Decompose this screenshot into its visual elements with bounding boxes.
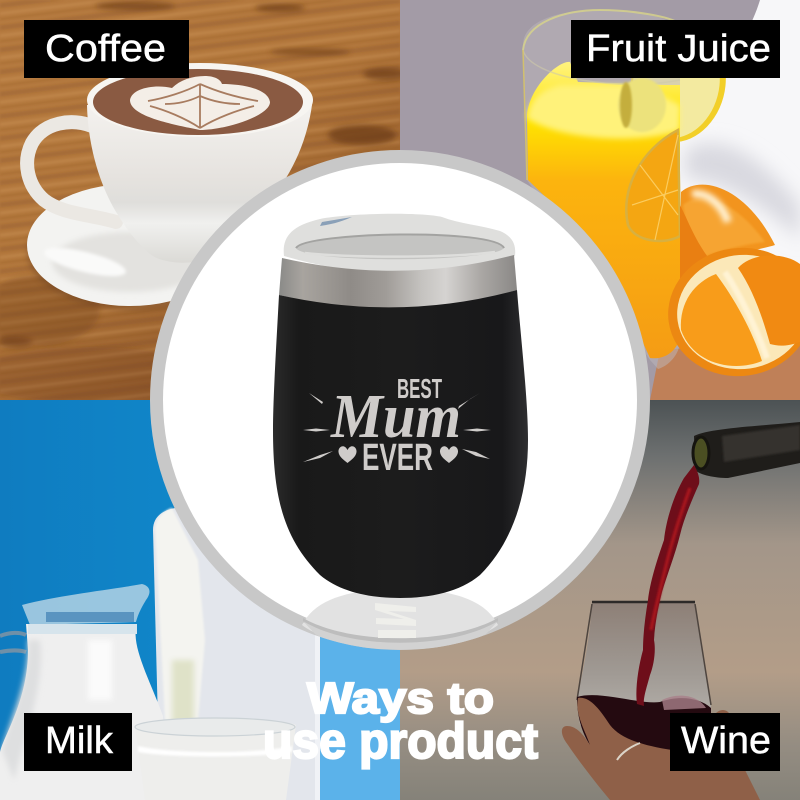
milk bottle	[153, 508, 320, 800]
halved orange front	[668, 248, 800, 376]
title: ways to use product	[263, 674, 538, 769]
wine stream highlight	[651, 488, 690, 630]
label: fruit juice: Fruit Juice	[586, 28, 771, 70]
engraved word: mum: Mum	[330, 383, 461, 451]
product circle	[156, 156, 644, 650]
wine stream	[636, 465, 699, 706]
glass of juice	[523, 10, 680, 369]
milk jug	[0, 584, 166, 800]
engraving: Best Mum Ever	[303, 373, 491, 479]
coffee surface	[93, 69, 303, 135]
panel: fruit juice photo	[400, 0, 800, 400]
engraved rays	[303, 393, 491, 462]
engraved hearts	[338, 446, 458, 463]
label: wine: Wine	[681, 720, 771, 762]
label: milk: Milk	[45, 720, 114, 762]
label: fruit juice	[571, 20, 780, 78]
wine bottle	[693, 422, 800, 478]
label: milk	[24, 713, 132, 771]
latte art	[130, 76, 270, 130]
halved orange back	[680, 185, 775, 280]
lemon slice on rim	[631, 78, 726, 142]
ring	[617, 743, 640, 760]
tumbler steel band	[279, 255, 517, 309]
cloth	[680, 0, 800, 290]
hand holding glass	[562, 698, 760, 800]
wine glass	[577, 602, 711, 755]
panel: milk photo	[0, 400, 400, 800]
coffee cup body	[87, 105, 312, 263]
panel: wine photo	[400, 400, 800, 800]
title line 2: use product	[263, 713, 538, 769]
fingertip behind label	[716, 710, 729, 713]
tumbler lid	[284, 214, 515, 273]
lemon slice inside glass	[626, 130, 680, 241]
label: coffee	[24, 20, 189, 78]
title line 1: Ways to	[307, 674, 494, 723]
engraved word: ever: EVER	[362, 437, 433, 479]
engraved word: best: BEST	[397, 373, 442, 404]
orange mat	[650, 340, 800, 400]
saucer	[25, 186, 192, 311]
lemon slice on glass edge	[618, 78, 666, 132]
tumbler reflection	[302, 588, 498, 650]
label: coffee: Coffee	[45, 28, 166, 70]
label: wine	[670, 713, 780, 771]
tumbler body	[273, 290, 528, 598]
coffee cup handle	[27, 122, 116, 222]
milk glass	[135, 718, 296, 800]
panel: coffee photo	[0, 0, 407, 403]
wood knots	[0, 2, 407, 403]
